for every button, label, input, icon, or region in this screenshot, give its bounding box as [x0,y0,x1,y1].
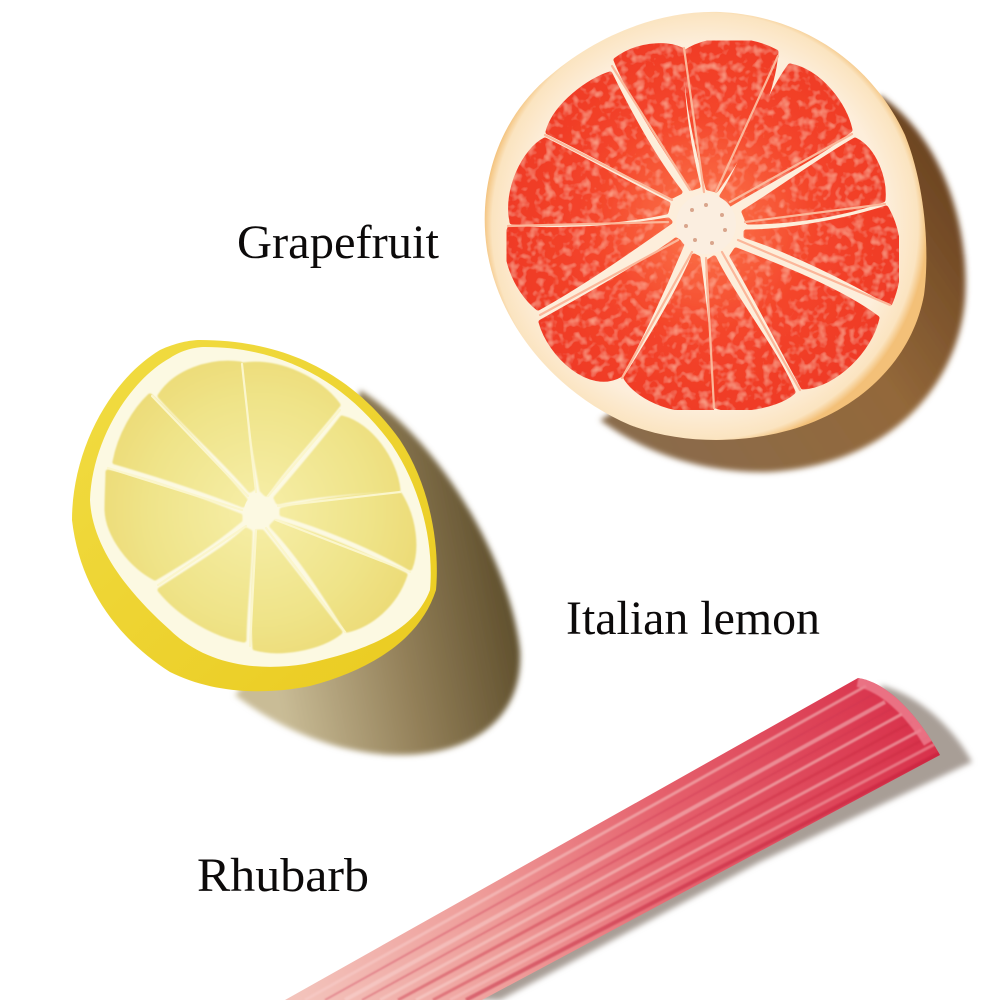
rhubarb body [285,678,940,1000]
lemon segment membranes [108,364,410,646]
lemon rind [72,340,437,691]
grapefruit shadow [600,95,966,472]
grapefruit rind [485,12,926,440]
rhubarb stalk [285,678,972,1000]
lemon core [244,495,272,527]
grapefruit segments [507,41,899,410]
lemon shadow [235,390,520,755]
rhubarb streaks [305,680,942,1000]
label: Rhubarb: Rhubarb [197,849,369,902]
label: Italian lemon: Italian lemon [566,592,820,645]
lemon segments [107,363,414,651]
lemon pith [90,347,431,667]
label: Grapefruit: Grapefruit [237,216,440,269]
grapefruit segment membranes [508,48,890,408]
rhubarb shadow [470,685,972,1000]
grapefruit slice [485,12,966,472]
grapefruit core [676,194,736,254]
lemon half [72,340,520,755]
